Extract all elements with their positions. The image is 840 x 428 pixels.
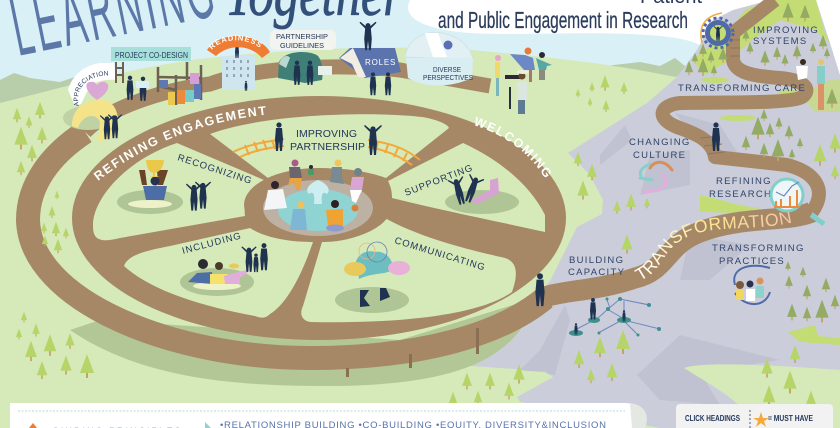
label: recognizing: RECOGNIZING	[176, 152, 254, 187]
label: including: INCLUDING	[181, 230, 243, 257]
outer path shadow	[70, 295, 545, 386]
sign	[111, 47, 191, 61]
click headings: CLICK HEADINGS	[685, 414, 741, 423]
key panel	[676, 404, 833, 428]
label: building capacity	[568, 255, 625, 278]
fountain jet	[307, 180, 329, 204]
winding path upper	[663, 0, 819, 212]
icon: teal arrow	[205, 422, 211, 428]
label: improving systems: SYSTEMS	[753, 36, 808, 47]
people with telescope	[495, 48, 552, 114]
distant hills	[0, 58, 690, 110]
label: changing culture: CHANGING	[629, 137, 691, 148]
icon: research chart magnifier	[771, 179, 824, 224]
mountain shadow facets	[520, 113, 780, 405]
arch banner	[207, 36, 270, 58]
label: transformation: TRANSFORMATION	[634, 212, 791, 279]
subtitle: and Public Engagement in Research	[438, 7, 688, 33]
recognizing illustration	[117, 160, 211, 214]
climber on path	[535, 273, 545, 306]
supporting illustration	[445, 174, 519, 214]
sector: communicating	[301, 217, 516, 322]
sign	[270, 30, 336, 50]
label: transforming care: TRANSFORMING CARE	[678, 83, 806, 94]
green right edge of mountain	[800, 80, 840, 112]
building	[222, 56, 255, 90]
label: transforming practices: TRANSFORMING	[712, 243, 805, 254]
steps	[700, 40, 740, 154]
icon: network	[569, 297, 661, 336]
orange ladder bridges	[233, 139, 420, 165]
mountain	[445, 0, 840, 428]
label: refining research: REFINING	[716, 176, 772, 187]
ring support posts	[346, 175, 538, 377]
label: refining research: RESEARCH	[709, 189, 772, 200]
climber on steps	[712, 122, 720, 151]
hub stone	[263, 180, 373, 236]
sector: including	[124, 228, 313, 318]
label: changing culture: CULTURE	[633, 150, 686, 161]
outer path	[28, 132, 545, 358]
label: changing culture	[629, 137, 691, 161]
tunnel appreciation	[63, 63, 122, 142]
sector: recognizing	[93, 143, 264, 240]
label: supporting: SUPPORTING	[403, 162, 475, 199]
banner text: READINESS	[208, 35, 262, 50]
partnership guidelines	[270, 30, 336, 85]
label: refining engagement: REFINING ENGAGEMENT	[94, 106, 266, 180]
appreciation banner	[68, 63, 116, 106]
wheel ring	[72, 96, 566, 340]
roles	[339, 22, 401, 95]
label: improving partnership: IMPROVING	[296, 128, 357, 140]
label: improving partnership	[290, 128, 365, 153]
label: improving partnership: PARTNERSHIP	[290, 141, 365, 153]
icon: doctor and patient	[796, 59, 825, 110]
legend panel	[10, 403, 647, 428]
sector: supporting	[388, 143, 545, 232]
label: improving systems: IMPROVING	[753, 25, 819, 36]
scaffold	[158, 62, 201, 105]
icon: practices cycle	[734, 266, 770, 304]
sector: improving partnership	[210, 114, 449, 178]
icon: hands circle culture	[640, 162, 672, 192]
readiness	[207, 35, 270, 91]
figures on bridges	[275, 122, 382, 155]
sky	[0, 0, 840, 110]
label: transforming practices: PRACTICES	[719, 256, 785, 267]
label: building capacity: CAPACITY	[568, 267, 625, 278]
fountain pool	[278, 189, 358, 231]
lower meadow patch	[684, 364, 840, 428]
label: improving systems	[753, 25, 819, 47]
project co-design	[111, 47, 201, 105]
label: building capacity: BUILDING	[569, 255, 624, 266]
diverse perspectives observatory	[405, 32, 473, 86]
label: transforming practices	[712, 243, 805, 267]
people around fountain	[264, 160, 364, 232]
sign text: PARTNERSHIP	[276, 32, 328, 41]
including illustration	[180, 243, 268, 296]
top path	[85, 67, 490, 132]
observatory text 2: PERSPECTIVES	[423, 73, 473, 82]
sign text: PROJECT CO-DESIGN	[115, 51, 188, 60]
roles text: ROLES	[365, 58, 396, 67]
mountain top green cap	[692, 0, 830, 75]
icon: orange marker	[29, 423, 37, 428]
central hub	[244, 160, 392, 242]
label: refining research	[709, 176, 772, 200]
lower-left meadow patch	[440, 366, 553, 404]
observatory text: DIVERSE	[433, 65, 461, 74]
heart	[86, 82, 108, 100]
cloud behind subtitle	[408, 0, 840, 85]
meadow	[0, 48, 680, 428]
sign text 2: GUIDELINES	[280, 41, 324, 50]
appreciation text: APPRECIATION	[74, 70, 108, 106]
tent	[278, 52, 323, 83]
winding path lower	[520, 212, 812, 314]
label: communicating: COMMUNICATING	[393, 235, 487, 274]
label: welcoming: WELCOMING	[475, 116, 551, 178]
communicating illustration	[335, 242, 410, 313]
mountain green patches	[700, 77, 840, 345]
must have: = MUST HAVE	[768, 414, 814, 423]
icon: star	[753, 412, 769, 427]
icon: gear with people	[701, 13, 733, 48]
